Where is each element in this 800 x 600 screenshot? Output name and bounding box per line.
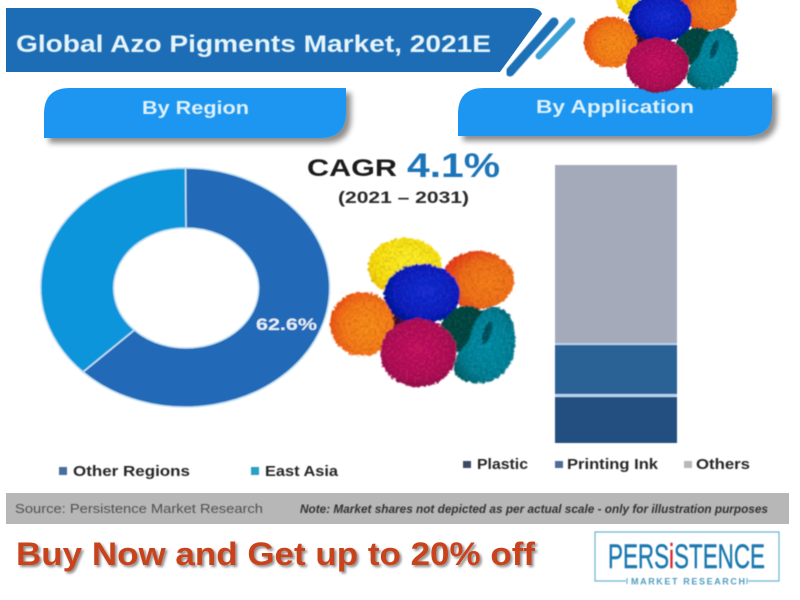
heading: By Application: By Application	[536, 97, 694, 117]
logo: Persistence Market Research	[595, 532, 779, 586]
donut chart: by region	[41, 168, 330, 407]
legend: region: East Asia	[265, 463, 339, 480]
legend: application: Plastic	[477, 456, 528, 473]
source and note bar	[6, 493, 789, 524]
legend: application: Others	[696, 456, 750, 473]
CAGR callout	[307, 147, 500, 207]
call to action: Buy Now and Get up to 20% off	[16, 536, 535, 572]
heading: By Region: By Region	[142, 98, 249, 118]
stacked bar chart: by application	[555, 165, 677, 443]
CAGR callout: CAGR	[307, 155, 397, 182]
heading: By Application	[458, 88, 772, 136]
CAGR callout: (2021 – 2031)	[338, 188, 469, 207]
legend: application: Printing Ink	[567, 456, 659, 473]
icon: pigment powder pile, top right	[584, 0, 738, 93]
legend: region: Other Regions	[73, 463, 190, 480]
source and note bar: Note: Market shares not depicted as per actual scale - only for illustration purposes	[300, 504, 768, 516]
heading: By Region	[44, 88, 346, 138]
value label: 62.6%	[256, 315, 317, 334]
legend: region	[59, 463, 339, 480]
segment: Others	[555, 165, 677, 343]
source and note bar: Source: Persistence Market Research	[15, 501, 263, 516]
icon: pigment powder pile, centre	[330, 238, 515, 387]
legend: application	[463, 456, 750, 473]
segment: East Asia	[41, 168, 186, 372]
CAGR callout: 4.1%	[407, 147, 500, 185]
segment: Other Regions 62.6%	[83, 168, 330, 407]
logo: Persistence Market Research: MARKET RESEARCH	[631, 576, 745, 586]
bar separators	[555, 340, 677, 400]
title banner	[6, 8, 542, 72]
segment: Printing Ink	[555, 345, 677, 394]
banner diagonal stripes	[510, 21, 572, 72]
segment: Plastic	[555, 397, 677, 443]
title banner: Global Azo Pigments Market, 2021E	[16, 31, 491, 58]
